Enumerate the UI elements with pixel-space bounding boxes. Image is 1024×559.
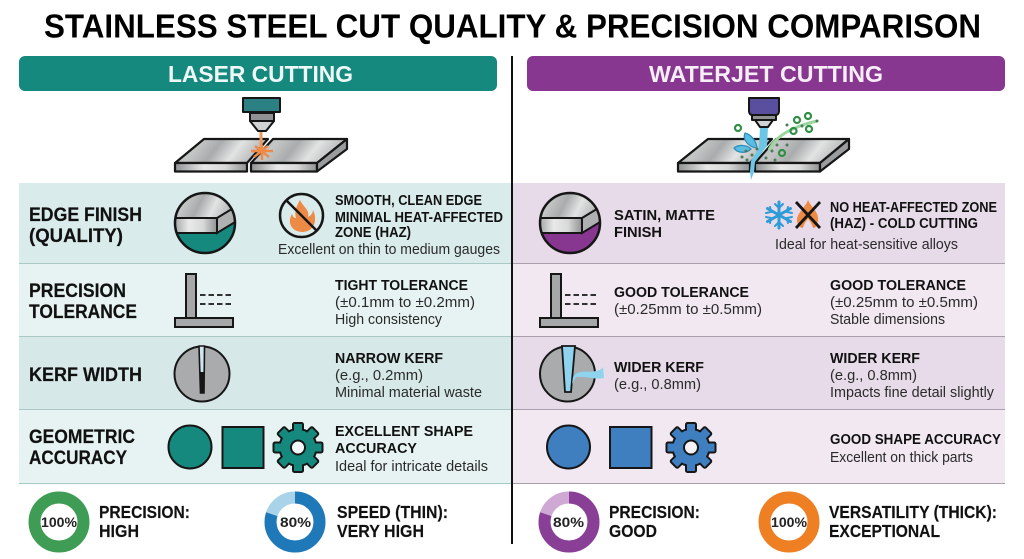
gauge: waterjet precision 80% — [544, 498, 594, 546]
text: precision good — [609, 502, 700, 541]
text: laser edge finish: MINIMAL HEAT-AFFECTED — [335, 210, 503, 226]
text: wider kerf short: (e.g., 0.8mm) — [614, 377, 701, 393]
row label: geometric accuracy — [29, 427, 135, 469]
text: speed very high: SPEED (THIN): — [337, 502, 448, 522]
title: STAINLESS STEEL CUT QUALITY & PRECISION COMPARISON — [44, 8, 981, 44]
gauge: laser precision 100%: 100% — [41, 514, 78, 530]
icon: waterjet tolerance — [540, 274, 599, 327]
row label: precision tolerance: PRECISION — [29, 281, 126, 302]
text: wider kerf short: WIDER KERF — [614, 360, 704, 376]
text: precision high — [99, 502, 190, 541]
text: tight tolerance: TIGHT TOLERANCE — [335, 278, 468, 294]
icon: teal square — [222, 427, 264, 468]
text: tight tolerance: (±0.1mm to ±0.2mm) — [335, 295, 475, 311]
icon: teal circle — [168, 426, 212, 468]
text: wider kerf detail — [830, 351, 995, 401]
gauge: waterjet precision 80%: 80% — [553, 514, 585, 530]
text: wider kerf detail: Impacts fine detail slightly — [830, 385, 995, 401]
text: good tolerance detail — [830, 278, 978, 328]
gauge: waterjet versatility 100%: 100% — [771, 514, 808, 530]
text: no heat-affected zone — [775, 200, 997, 253]
panel: waterjet comparison rows — [513, 183, 1005, 484]
icon: snowflake — [766, 202, 792, 228]
row label: precision tolerance: TOLERANCE — [29, 302, 137, 323]
text: no heat-affected zone: (HAZ) - COLD CUTTING — [830, 216, 978, 232]
gauge: laser speed 80%: 80% — [280, 514, 312, 530]
text: narrow kerf: Minimal material waste — [335, 385, 482, 401]
text: narrow kerf — [335, 351, 482, 401]
text: good tolerance detail: (±0.25mm to ±0.5mm) — [830, 295, 978, 311]
row label: geometric accuracy: GEOMETRIC — [29, 427, 135, 448]
icon: blue circle — [547, 426, 590, 468]
icon: laser cutting head on steel plates — [175, 98, 347, 172]
text: wider kerf detail: (e.g., 0.8mm) — [830, 368, 917, 384]
icon: no flame — [280, 194, 323, 237]
gauge: waterjet versatility 100% — [764, 498, 814, 546]
text: precision high: HIGH — [99, 521, 139, 541]
row label: kerf width: KERF WIDTH — [29, 365, 142, 386]
text: laser edge finish: Excellent on thin to medium gauges — [278, 242, 500, 258]
panel: waterjet header: WATERJET CUTTING — [649, 61, 883, 87]
text: excellent shape accuracy: EXCELLENT SHAPE — [335, 424, 473, 440]
text: precision good: GOOD — [609, 521, 657, 541]
row label: edge finish: (QUALITY) — [29, 226, 123, 247]
text: excellent shape accuracy: Ideal for intricate details — [335, 459, 488, 475]
text: good tolerance detail: Stable dimensions — [830, 312, 945, 328]
text: precision high: PRECISION: — [99, 502, 190, 522]
gauge: laser precision 100% — [34, 498, 84, 546]
text: wider kerf detail: WIDER KERF — [830, 351, 920, 367]
text: wider kerf short — [614, 360, 704, 393]
text: laser edge finish: ZONE (HAZ) — [335, 225, 411, 241]
text: excellent shape accuracy: ACCURACY — [335, 441, 417, 457]
icon: blue gear — [666, 423, 716, 472]
text: no heat-affected zone: Ideal for heat-sensitive alloys — [775, 237, 958, 253]
icon: waterjet cutting head on steel plates — [678, 98, 849, 180]
divider — [511, 56, 513, 544]
text: versatility exceptional — [829, 502, 997, 541]
text: narrow kerf: NARROW KERF — [335, 351, 443, 367]
text: satin finish: SATIN, MATTE — [614, 208, 715, 224]
text: tight tolerance — [335, 278, 475, 328]
text: precision good: PRECISION: — [609, 502, 700, 522]
icon: laser tolerance — [175, 274, 234, 327]
text: laser edge finish — [278, 193, 503, 258]
icon: wider kerf — [540, 346, 604, 402]
icon: waterjet edge finish — [538, 192, 602, 254]
text: excellent shape accuracy — [335, 424, 488, 475]
text: speed very high: VERY HIGH — [337, 521, 424, 541]
panel: laser header — [19, 56, 497, 91]
icon: narrow kerf — [174, 346, 230, 402]
row label: precision tolerance — [29, 281, 137, 323]
text: versatility exceptional: VERSATILITY (THICK): — [829, 502, 997, 522]
icon: crossed-out flame — [796, 200, 820, 228]
gauge: laser speed 80% — [270, 498, 320, 546]
text: no heat-affected zone: NO HEAT-AFFECTED ZONE — [830, 200, 997, 216]
panel: waterjet header — [527, 56, 1005, 91]
text: good tolerance short: (±0.25mm to ±0.5mm) — [614, 302, 762, 318]
text: good shape accuracy — [830, 432, 1001, 466]
row label: edge finish — [29, 205, 142, 247]
panel: laser comparison rows — [19, 183, 512, 484]
text: speed very high — [337, 502, 448, 541]
panel: laser header: LASER CUTTING — [168, 61, 353, 87]
text: satin finish: FINISH — [614, 225, 662, 241]
text: versatility exceptional: EXCEPTIONAL — [829, 521, 940, 541]
icon: laser edge finish — [174, 192, 236, 254]
text: tight tolerance: High consistency — [335, 312, 443, 328]
text: good shape accuracy: GOOD SHAPE ACCURACY — [830, 432, 1001, 448]
text: good shape accuracy: Excellent on thick parts — [830, 450, 973, 466]
text: narrow kerf: (e.g., 0.2mm) — [335, 368, 423, 384]
text: satin finish — [614, 208, 715, 241]
icon: teal gear — [274, 423, 322, 472]
text: good tolerance short — [614, 285, 762, 318]
icon: blue square — [610, 427, 652, 468]
text: laser edge finish: SMOOTH, CLEAN EDGE — [335, 193, 482, 209]
row label: geometric accuracy: ACCURACY — [29, 448, 127, 469]
row label: edge finish: EDGE FINISH — [29, 205, 142, 226]
text: good tolerance short: GOOD TOLERANCE — [614, 285, 749, 301]
text: good tolerance detail: GOOD TOLERANCE — [830, 278, 966, 294]
